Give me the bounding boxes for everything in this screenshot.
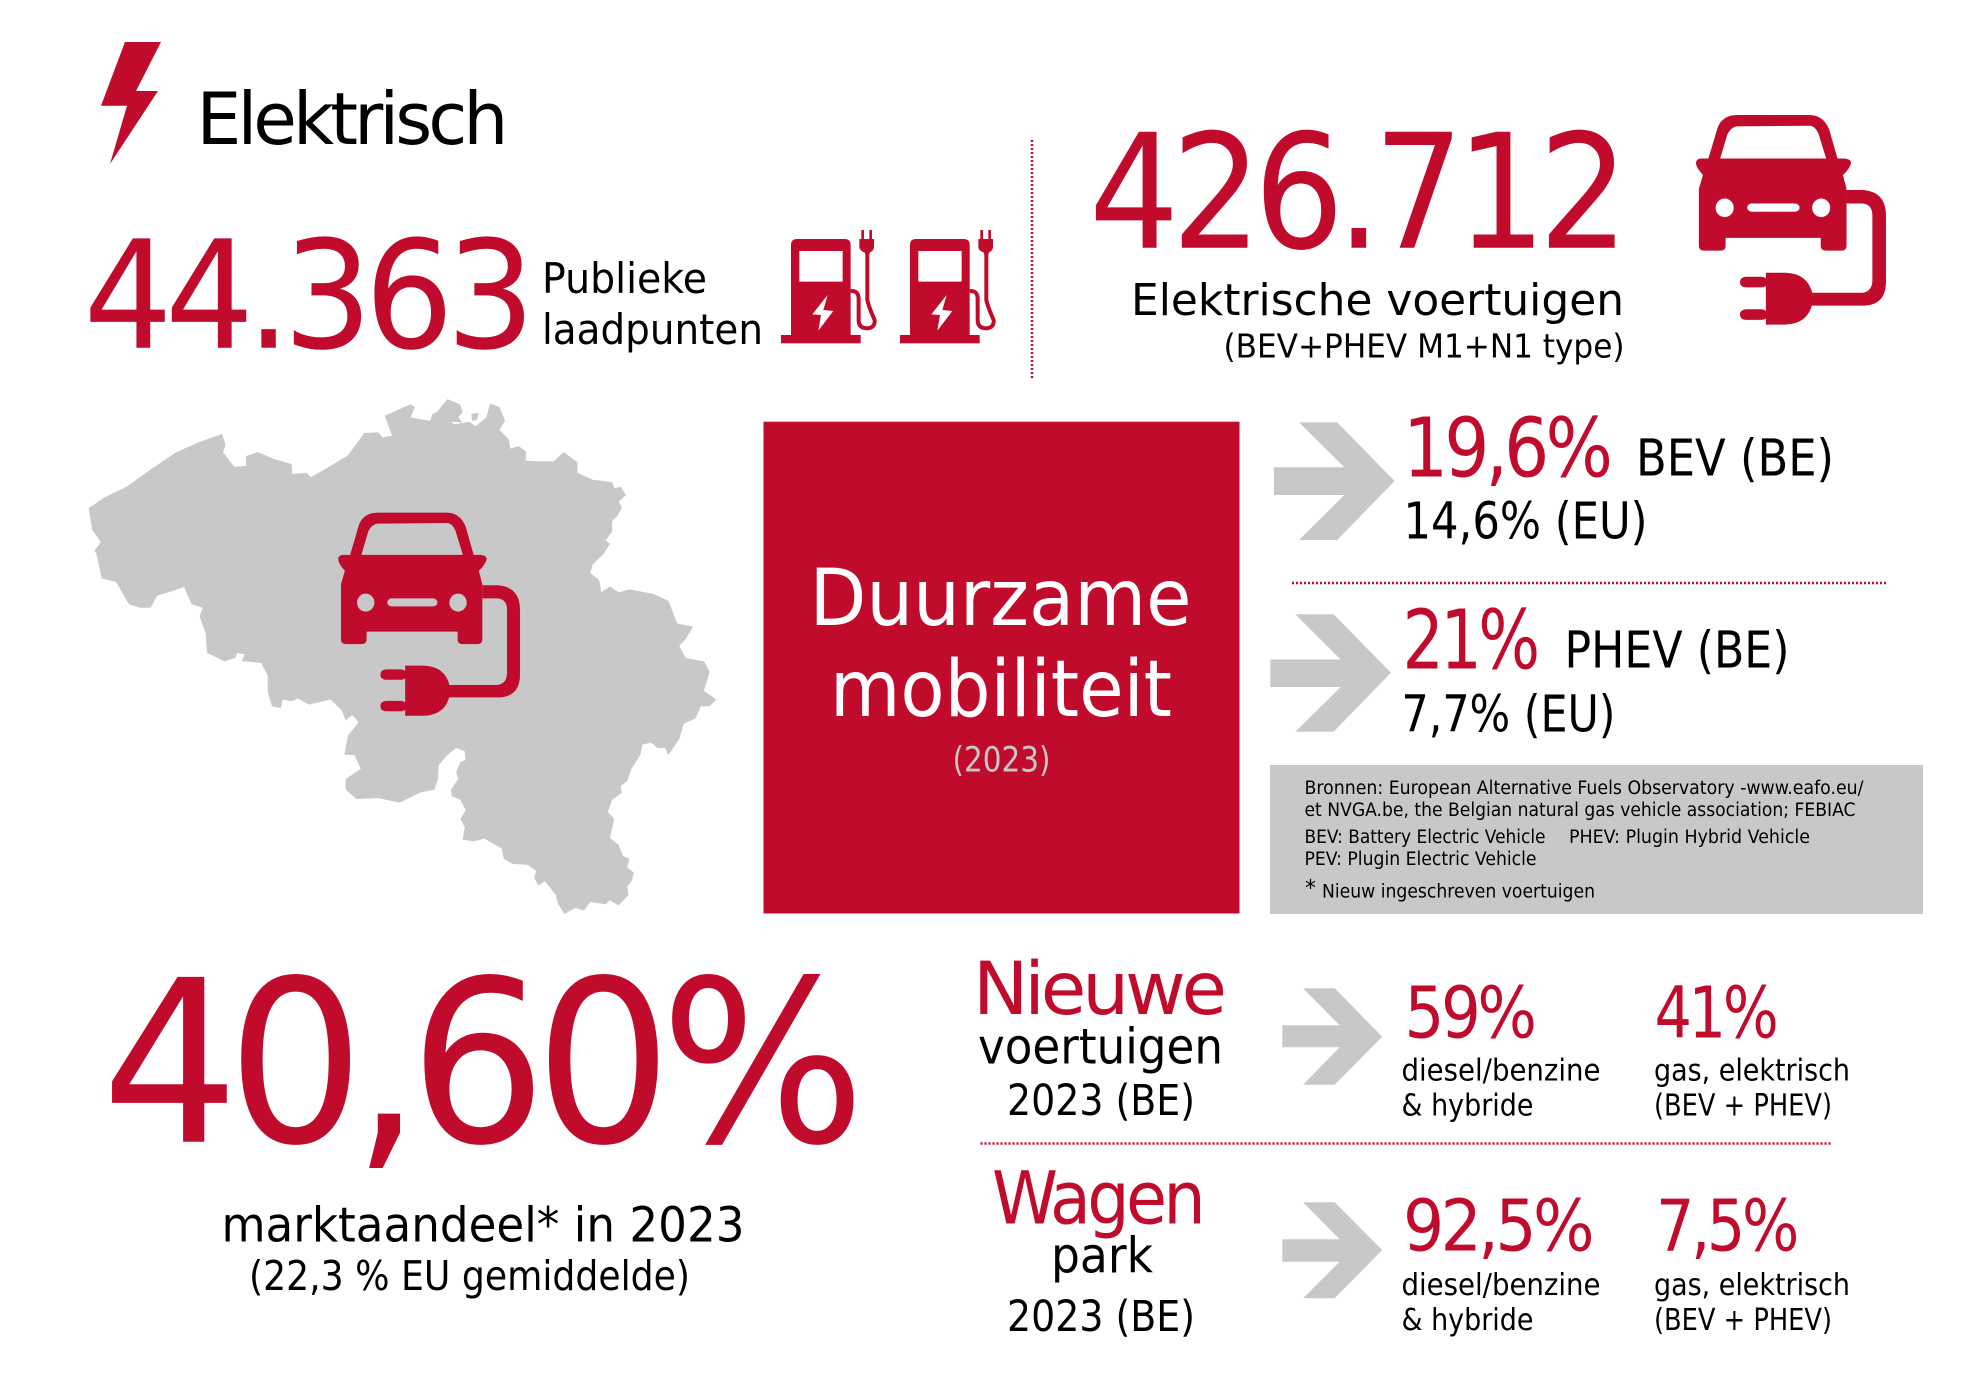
year: (2023)	[952, 740, 1050, 780]
icon: charging station 1	[781, 230, 875, 343]
arrow	[1270, 614, 1391, 732]
panel: sources	[1270, 765, 1923, 914]
number: 40,60%: 40,60%	[102, 933, 854, 1196]
label: (BEV + PHEV): (BEV + PHEV)	[1654, 1303, 1832, 1338]
label: PHEV (BE): PHEV (BE)	[1564, 622, 1790, 680]
heading: Nieuwe: Nieuwe	[973, 947, 1224, 1032]
icon: lightning bolt	[101, 42, 161, 164]
label: & hybride: & hybride	[1402, 1088, 1534, 1124]
stat: market share	[102, 933, 854, 1300]
stat: PHEV share	[1270, 594, 1790, 744]
heading: mobiliteit: mobiliteit	[830, 645, 1172, 735]
heading: park: park	[1051, 1227, 1154, 1284]
icon: electric car with plug	[1696, 115, 1886, 325]
map: Belgium	[89, 399, 716, 914]
label: (BEV + PHEV): (BEV + PHEV)	[1654, 1088, 1832, 1124]
label: 14,6% (EU): 14,6% (EU)	[1404, 492, 1648, 552]
stat: public charging points	[84, 210, 994, 384]
value: 59%: 59%	[1404, 971, 1534, 1054]
text: sources: Bronnen: European Alternative Fuels Observatory -www.eafo.eu/	[1304, 778, 1864, 799]
text: BEV definition: BEV: Battery Electric Vehicle	[1304, 827, 1546, 848]
text: asterisk note: *	[1305, 876, 1316, 902]
stat: electric vehicles	[1089, 101, 1886, 366]
label: & hybride: & hybride	[1402, 1303, 1534, 1338]
section: Wagenpark	[992, 1156, 1850, 1342]
heading: Duurzame: Duurzame	[810, 554, 1192, 644]
label: Elektrische voertuigen: Elektrische voertuigen	[1131, 275, 1624, 326]
arrow	[1282, 1202, 1382, 1298]
label: gas, elektrisch: gas, elektrisch	[1654, 1054, 1850, 1089]
text: PHEV definition: PHEV: Plugin Hybrid Vehicle	[1569, 827, 1810, 848]
label: BEV (BE): BEV (BE)	[1636, 430, 1834, 488]
title: Elektrisch	[101, 42, 504, 164]
label: Publieke: Publieke	[542, 254, 707, 303]
number: 426.712: 426.712	[1089, 101, 1621, 286]
text: PEV definition: PEV: Plugin Electric Vehicle	[1304, 849, 1536, 870]
stat: BEV share	[1274, 402, 1834, 552]
label: diesel/benzine: diesel/benzine	[1402, 1268, 1600, 1303]
value: 7,5%: 7,5%	[1656, 1184, 1796, 1268]
label: EU average: (22,3 % EU gemiddelde)	[249, 1252, 690, 1300]
value: 19,6%: 19,6%	[1403, 402, 1610, 496]
panel: Duurzame mobiliteit	[764, 422, 1240, 914]
heading text: Elektrisch	[196, 77, 504, 161]
text: newly registered vehicles: Nieuw ingeschreven voertuigen	[1322, 882, 1595, 902]
number: 44.363: 44.363	[84, 210, 528, 384]
arrow	[1282, 988, 1382, 1085]
value: 92,5%: 92,5%	[1403, 1184, 1591, 1268]
heading: voertuigen: voertuigen	[978, 1018, 1223, 1076]
label: gas, elektrisch: gas, elektrisch	[1654, 1268, 1850, 1303]
arrow	[1274, 422, 1395, 540]
value: 21%: 21%	[1402, 594, 1537, 689]
label: laadpunten: laadpunten	[542, 305, 763, 354]
text: sources line 2: et NVGA.be, the Belgian natural gas vehicle association; FEBIAC	[1304, 800, 1856, 821]
label: 7,7% (EU): 7,7% (EU)	[1402, 686, 1616, 744]
label: marktaandeel: marktaandeel* in 2023	[222, 1198, 744, 1254]
section: Nieuwe voertuigen	[973, 947, 1850, 1126]
label: vehicle type: (BEV+PHEV M1+N1 type)	[1224, 327, 1624, 366]
label: diesel/benzine: diesel/benzine	[1402, 1054, 1600, 1089]
map of Belgium with car icon	[89, 399, 716, 914]
heading: 2023 (BE): 2023 (BE)	[1007, 1293, 1195, 1342]
heading: Wagen: Wagen	[992, 1156, 1202, 1241]
icon: charging station 2	[900, 230, 994, 343]
heading: 2023 (BE): 2023 (BE)	[1007, 1077, 1195, 1126]
value: 41%: 41%	[1654, 971, 1776, 1054]
icon: electric car with plug	[338, 513, 520, 716]
